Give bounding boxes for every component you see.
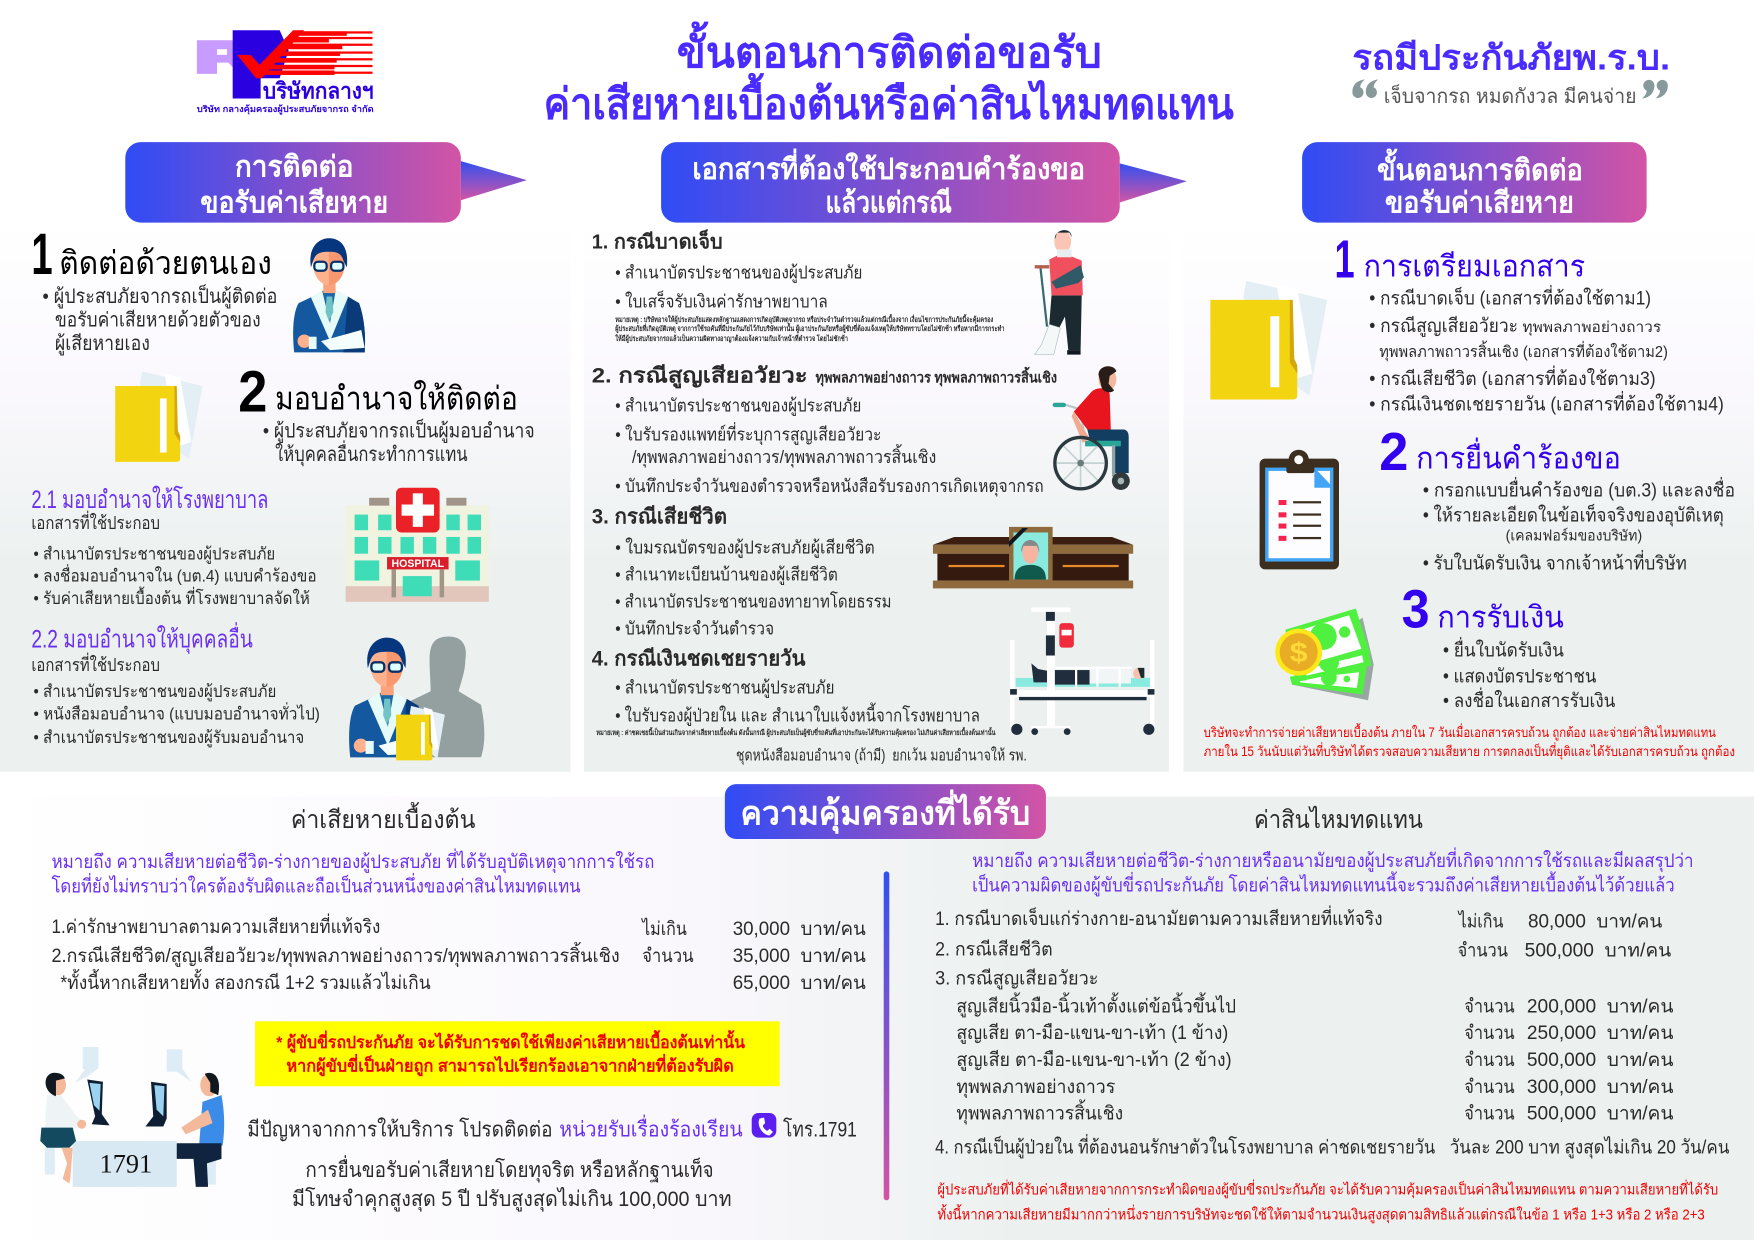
- table of amounts: สูญเสียนิ้วมือ-นิ้วเท้าตั้งแต่ข้อนิ้วขึ้นไป: [956, 992, 1236, 1017]
- icon: close quote: [1642, 80, 1668, 98]
- slogan: [1352, 38, 1670, 108]
- table of amounts: 80,000 บาท/คน: [1528, 911, 1662, 932]
- section: case 3 death: • สำเนาทะเบียนบ้านของผู้เสียชีวิต: [615, 565, 838, 586]
- text: fraud warning: การยื่นขอรับค่าเสียหายโดยทุจริต หรือหลักฐานเท็จ: [305, 1155, 714, 1183]
- left column: contact methods: [31, 222, 535, 760]
- header: contact: ขอรับค่าเสียหาย: [200, 188, 388, 220]
- step 1 list: [1369, 284, 1724, 416]
- icon: hospital: [346, 488, 489, 602]
- header: steps: ขั้นตอนการติดต่อ: [1377, 148, 1583, 187]
- header: documents: แล้วแต่กรณี: [826, 188, 952, 220]
- text: method 1 description: ผู้เสียหายเอง: [55, 333, 150, 356]
- panel: initial damages: [40, 802, 866, 1212]
- panel: background left: [0, 224, 570, 772]
- right column: procedure steps: [1204, 229, 1735, 760]
- text: 2.2 other person: • หนังสือมอบอำนาจ (แบบมอบอำนาจทั่วไป): [34, 701, 320, 723]
- logo: [197, 30, 374, 115]
- table of amounts: 500,000 บาท/คน: [1525, 940, 1671, 961]
- step 2 list: • ให้รายละเอียดในข้อเท็จจริงของอุบัติเหตุ: [1423, 502, 1724, 527]
- slogan: เจ็บจากรถ หมดกังวล มีคนจ่าย: [1384, 83, 1637, 108]
- arrow: contact to documents: [461, 161, 527, 200]
- text: 2.1 hospital: • ลงชื่อมอบอำนาจใน (บต.4) แบบคำร้องขอ: [34, 564, 317, 586]
- text: power of attorney note: ชุดหนังสือมอบอำนาจ (ถ้ามี) ยกเว้น มอบอำนาจให้ รพ.: [736, 746, 1027, 766]
- step 3 heading: การรับเงิน: [1437, 602, 1564, 635]
- table of amounts: วันละ 200 บาท สูงสุดไม่เกิน 20 วัน/คน: [1450, 1136, 1729, 1159]
- section: case 3 death: • ใบมรณบัตรของผู้ประสบภัยผู้เสียชีวิต: [615, 538, 875, 559]
- section: case 2 loss of organ: • บันทึกประจำวันของตำรวจหรือหนังสือรับรองการเกิดเหตุจากรถ: [615, 476, 1044, 497]
- text: method 1 description: [43, 283, 277, 356]
- step 3 list: [1443, 637, 1615, 712]
- table of amounts: 3. กรณีสูญเสียอวัยวะ: [935, 967, 1098, 989]
- slogan: รถมีประกันภัยพ.ร.บ.: [1352, 38, 1670, 77]
- section: case 4 daily compensation: • ใบรับรองผู้ป่วยใน และ สำเนาใบแจ้งหนี้จากโรงพยาบาล: [615, 703, 980, 727]
- definition: [51, 848, 654, 898]
- header: steps: [1302, 142, 1647, 223]
- table of amounts: จำนวน: [642, 946, 694, 967]
- header: coverage: ความคุ้มครองที่ได้รับ: [741, 788, 1030, 834]
- step 2 list: • รับใบนัดรับเงิน จากเจ้าหน้าที่บริษัท: [1423, 549, 1687, 574]
- heading: method 1: [31, 222, 272, 287]
- table of amounts: 250,000 บาท/คน: [1527, 1023, 1673, 1044]
- text: 2.2 other person: • สำเนาบัตรประชาชนของผู้รับมอบอำนาจ: [34, 728, 304, 748]
- table of amounts: 2. กรณีเสียชีวิต: [935, 938, 1053, 960]
- table of amounts: สูญเสีย ตา-มือ-แขน-ขา-เท้า (1 ข้าง): [956, 1022, 1228, 1044]
- table of amounts: 4. กรณีเป็นผู้ป่วยใน ที่ต้องนอนรักษาตัวในโรงพยาบาล ค่าชดเชยรายวัน: [935, 1133, 1435, 1158]
- text: 2.1 hospital: • รับค่าเสียหายเบื้องต้น ที่โรงพยาบาลจัดให้: [34, 586, 310, 608]
- title: ค่าเสียหายเบื้องต้นหรือค่าสินไหมทดแทน: [544, 73, 1234, 129]
- icon: hospital: HOSPITAL: [392, 558, 444, 570]
- heading: method 2: มอบอำนาจให้ติดต่อ: [275, 379, 518, 416]
- icon: coffin with portrait: [933, 527, 1133, 588]
- step 1 list: • กรณีเสียชีวิต (เอกสารที่ต้องใช้ตาม3): [1369, 365, 1656, 390]
- section: case 2 loss of organ: 2. กรณีสูญเสียอวัยวะ: [592, 364, 808, 390]
- panel: background right: [1184, 224, 1754, 772]
- step 2 list: [1423, 477, 1735, 574]
- table of amounts: [51, 913, 866, 994]
- callout: yellow warning: * ผู้ขับขี่รถประกันภัย จะได้รับการชดใช้เพียงค่าเสียหายเบื้องต้นเท่านั้น: [276, 1029, 745, 1054]
- section: case 4 daily compensation: • สำเนาบัตรประชาชนผู้ประสบภัย: [615, 678, 834, 699]
- table of amounts: ไม่เกิน: [640, 918, 687, 940]
- heading: method 1: ติดต่อด้วยตนเอง: [59, 245, 272, 281]
- step 1 heading: การเตรียมเอกสาร: [1364, 250, 1585, 283]
- text: 2.2 other person: • สำเนาบัตรประชาชนของผู้ประสบภัย: [34, 682, 276, 702]
- table of amounts: 65,000 บาท/คน: [733, 973, 866, 994]
- panel: background middle: [584, 224, 1169, 772]
- section: case 3 death: [592, 505, 892, 638]
- text: fraud warning: [292, 1155, 732, 1212]
- text: method 2 description: ให้บุคคลอื่นกระทำการแทน: [275, 440, 468, 467]
- section: case 3 death: • บันทึกประจำวันตำรวจ: [615, 618, 774, 638]
- heading: ค่าสินไหมทดแทน: [1254, 806, 1423, 834]
- table of amounts: 35,000 บาท/คน: [733, 946, 866, 967]
- logo: บริษัทกลางฯ: [263, 78, 374, 103]
- icon: man with shadow person and folder: [349, 636, 484, 760]
- section: case 1 injury: 1. กรณีบาดเจ็บ: [592, 228, 723, 253]
- text: 2.2 other person: เอกสารที่ใช้ประกอบ: [31, 652, 160, 675]
- icon: money and coin: $: [1290, 637, 1308, 668]
- step 2 list: (เคลมฟอร์มของบริษัท): [1506, 527, 1642, 544]
- step 2 heading: [1379, 422, 1621, 482]
- icon: folder: [115, 371, 202, 462]
- header: contact: [125, 142, 461, 223]
- icon: injured man: [293, 238, 365, 352]
- section: case 2 loss of organ: /ทุพพลภาพอย่างถาวร/ทุพพลภาพถาวรสิ้นเชิง: [632, 444, 936, 468]
- definition: หมายถึง ความเสียหายต่อชีวิต-ร่างกายของผู้ประสบภัย ที่ได้รับอุบัติเหตุจากการใช้รถ: [51, 848, 654, 874]
- icon: open quote: [1352, 79, 1378, 98]
- table of amounts: [935, 905, 1729, 1159]
- heading: method 1: 1: [31, 222, 53, 287]
- table of amounts: *ทั้งนี้หากเสียหายทั้ง สองกรณี 1+2 รวมแล้วไม่เกิน: [60, 969, 431, 994]
- section: case 2 loss of organ: • ใบรับรองแพทย์ที่ระบุการสูญเสียอวัยวะ: [615, 422, 881, 446]
- table of amounts: ทุพพลภาพอย่างถาวร: [956, 1077, 1115, 1099]
- icon: large folder: [1210, 281, 1327, 400]
- table of amounts: 500,000 บาท/คน: [1527, 1104, 1673, 1125]
- section: case 1 injury: • สำเนาบัตรประชาชนของผู้ประสบภัย: [615, 263, 862, 284]
- text: method 2 description: [263, 417, 535, 467]
- title: [544, 21, 1234, 129]
- middle column: required documents: [592, 228, 1154, 766]
- text: complaints contact: โทร.1791: [783, 1118, 857, 1142]
- header: coverage: [725, 784, 1046, 839]
- step 3 list: • แสดงบัตรประชาชน: [1443, 666, 1596, 687]
- text: complaints contact: มีปัญหาจากการให้บริการ โปรดติดต่อ: [247, 1118, 553, 1142]
- step 1 list: ทุพพลภาพอย่างถาวร: [1522, 320, 1661, 336]
- step 1 heading: [1335, 229, 1585, 289]
- table of amounts: 500,000 บาท/คน: [1527, 1050, 1673, 1071]
- text: 2.2 other person: 2.2 มอบอำนาจให้บุคคลอื่น: [31, 622, 253, 655]
- table of amounts: 1. กรณีบาดเจ็บแก่ร่างกาย-อนามัยตามความเสียหายที่แท้จริง: [935, 905, 1383, 930]
- table of amounts: 30,000 บาท/คน: [733, 919, 866, 940]
- section: case 3 death: • สำเนาบัตรประชาชนของทายาทโดยธรรม: [615, 590, 892, 611]
- icon: call centre with 1791 desk: 1791: [100, 1148, 152, 1178]
- icon: money and coin: [1275, 609, 1374, 700]
- step 3 list: • ลงชื่อในเอกสารรับเงิน: [1443, 687, 1615, 712]
- arrow: documents to steps: [1120, 163, 1187, 202]
- table of amounts: 1.ค่ารักษาพยาบาลตามความเสียหายที่แท้จริง: [51, 913, 380, 938]
- section: case 4 daily compensation: [592, 647, 996, 738]
- red payment note: [1204, 723, 1735, 760]
- table of amounts: ทุพพลภาพถาวรสิ้นเชิง: [956, 1100, 1123, 1126]
- text: 2.1 hospital: เอกสารที่ใช้ประกอบ: [31, 510, 160, 533]
- text: 2.1 hospital: [31, 486, 317, 608]
- text: fraud warning: มีโทษจำคุกสูงสุด 5 ปี ปรับสูงสุดไม่เกิน 100,000 บาท: [292, 1187, 732, 1212]
- panel: compensation: [935, 806, 1729, 1223]
- heading: method 2: 2: [238, 360, 267, 425]
- step 2 heading: การยื่นคำร้องขอ: [1416, 438, 1621, 476]
- header: documents: เอกสารที่ต้องใช้ประกอบคำร้องขอ: [692, 148, 1085, 186]
- panel: background bottom: [0, 796, 1754, 1240]
- text: method 2 description: • ผู้ประสบภัยจากรถเป็นผู้มอบอำนาจ: [263, 417, 535, 443]
- text: complaints contact: [247, 1113, 857, 1142]
- step 1 list: • กรณีเงินชดเชยรายวัน (เอกสารที่ต้องใช้ตาม4): [1369, 391, 1724, 416]
- header: contact: การติดต่อ: [235, 152, 353, 184]
- callout: yellow warning: หากผู้ขับขี่เป็นฝ่ายถูก สามารถไปเรียกร้องเอาจากฝ่ายที่ต้องรับผิด: [286, 1054, 734, 1078]
- table of amounts: ไม่เกิน: [1457, 910, 1503, 932]
- text: method 1 description: • ผู้ประสบภัยจากรถเป็นผู้ติดต่อ: [43, 283, 277, 309]
- section: case 2 loss of organ: [592, 364, 1057, 497]
- table of amounts: จำนวน: [1464, 1077, 1515, 1098]
- text: 2.2 other person: [31, 622, 320, 748]
- text: complaints contact: หน่วยรับเรื่องร้องเรียน: [559, 1115, 743, 1142]
- section: case 1 injury: หมายเหตุ : บริษัทอาจให้ผู้ประสบภัยแสดงหลักฐานแสดงการเกิดอุบัติเหตุจากรถ หรือประจำวันตำรวจแล้วแต่กรณีเบื้องจาก เงื่อนไขการประกันภัยนี้จะคุ้มครอง: [615, 313, 994, 325]
- section: case 4 daily compensation: หมายเหตุ : ค่าชดเชยนี้เป็นส่วนเกินจากค่าเสียหายเบื้องต้น ดังนั้นกรณี ผู้ประสบภัยเป็นผู้ขับขี่รถคันที่เอาประกันจะได้รับความคุ้มครอง ไม่เกินค่าเสียหายเบื้องต้นเท่านั้น: [596, 726, 996, 738]
- icon: clipboard: [1260, 450, 1339, 569]
- step 1 list: • กรณีบาดเจ็บ (เอกสารที่ต้องใช้ตาม1): [1369, 284, 1651, 309]
- text: method 1 description: ขอรับค่าเสียหายด้วยตัวของ: [55, 310, 261, 332]
- table of amounts: 300,000 บาท/คน: [1527, 1077, 1673, 1098]
- table of amounts: จำนวน: [1464, 996, 1515, 1017]
- header: steps: ขอรับค่าเสียหาย: [1385, 188, 1574, 220]
- step 1 list: ทุพพลภาพถาวรสิ้นเชิง (เอกสารที่ต้องใช้ตาม2): [1379, 340, 1668, 362]
- step 2 heading: 2: [1379, 422, 1408, 482]
- icon: man on crutch: [1035, 230, 1084, 355]
- step 3 heading: 3: [1402, 580, 1430, 640]
- divider: [884, 871, 889, 1200]
- icon: person in wheelchair: [1053, 366, 1130, 490]
- definition: เป็นความผิดของผู้ขับขี่รถประกันภัย โดยค่าสินไหมทดแทนนี้จะรวมถึงค่าเสียหายเบื้องต้นไว้ด้วยแล้ว: [972, 872, 1675, 897]
- step 1 heading: 1: [1335, 229, 1355, 289]
- section: case 2 loss of organ: ทุพพลภาพอย่างถาวร ทุพพลภาพถาวรสิ้นเชิง: [815, 367, 1057, 387]
- table of amounts: จำนวน: [1464, 1104, 1515, 1125]
- step 2 list: • กรอกแบบยื่นคำร้องขอ (บต.3) และลงชื่อ: [1423, 477, 1735, 502]
- table of amounts: 2.กรณีเสียชีวิต/สูญเสียอวัยวะ/ทุพพลภาพอย่างถาวร/ทุพพลภาพถาวรสิ้นเชิง: [51, 942, 620, 968]
- section: case 3 death: 3. กรณีเสียชีวิต: [592, 505, 727, 529]
- step 3 heading: [1402, 580, 1564, 640]
- icon: patient on hospital bed: [1010, 607, 1154, 735]
- callout: yellow warning: [255, 1021, 780, 1086]
- icon: call centre with 1791 desk: [40, 1047, 224, 1187]
- logo: บริษัท กลางคุ้มครองผู้ประสบภัยจากรถ จำกัด: [197, 104, 374, 115]
- definition: โดยที่ยังไม่ทราบว่าใครต้องรับผิดและถือเป็นส่วนหนึ่งของค่าสินไหมทดแทน: [51, 873, 581, 898]
- section: case 1 injury: ให้มีผู้ประสบภัยจากรถแล้วเป็นความผิดทางอาญาต้องแจ้งความกับเจ้าหน้าที่ตำรวจ โดยไม่ชักช้า: [615, 333, 848, 344]
- definition: [972, 847, 1694, 897]
- header: documents: [661, 142, 1120, 223]
- red note: [937, 1180, 1718, 1223]
- heading: method 2: [238, 360, 518, 425]
- title: ขั้นตอนการติดต่อขอรับ: [677, 21, 1102, 77]
- heading: ค่าเสียหายเบื้องต้น: [291, 802, 476, 834]
- step 3 list: • ยื่นใบนัดรับเงิน: [1443, 637, 1564, 662]
- table of amounts: 200,000 บาท/คน: [1527, 996, 1673, 1017]
- section: case 1 injury: ผู้ประสบภัยที่เกิดอุบัติเหตุ จากการใช้รถคันที่มีประกันภัยไว้กับบริษัทเท่านั้น ผู้เอาประกันภัยหรือผู้ขับขี่ต้องแจ้งเหตุให้บริษัททราบโดยไม่ชักช้า หรือหากมีการกระทำ: [615, 322, 1005, 334]
- section: case 1 injury: • ใบเสร็จรับเงินค่ารักษาพยาบาล: [615, 291, 828, 312]
- icon: phone: [752, 1113, 776, 1138]
- section: case 4 daily compensation: 4. กรณีเงินชดเชยรายวัน: [592, 647, 806, 671]
- table of amounts: จำนวน: [1464, 1050, 1515, 1071]
- section: case 2 loss of organ: • สำเนาบัตรประชาชนของผู้ประสบภัย: [615, 396, 861, 417]
- text: 2.1 hospital: 2.1 มอบอำนาจให้โรงพยาบาล: [31, 486, 268, 514]
- table of amounts: สูญเสีย ตา-มือ-แขน-ขา-เท้า (2 ข้าง): [956, 1049, 1232, 1071]
- text: 2.1 hospital: • สำเนาบัตรประชาชนของผู้ประสบภัย: [34, 544, 275, 564]
- table of amounts: จำนวน: [1458, 940, 1508, 961]
- step 1 list: • กรณีสูญเสียอวัยวะ: [1369, 315, 1518, 337]
- section: case 1 injury: [592, 228, 1005, 344]
- table of amounts: จำนวน: [1464, 1023, 1515, 1044]
